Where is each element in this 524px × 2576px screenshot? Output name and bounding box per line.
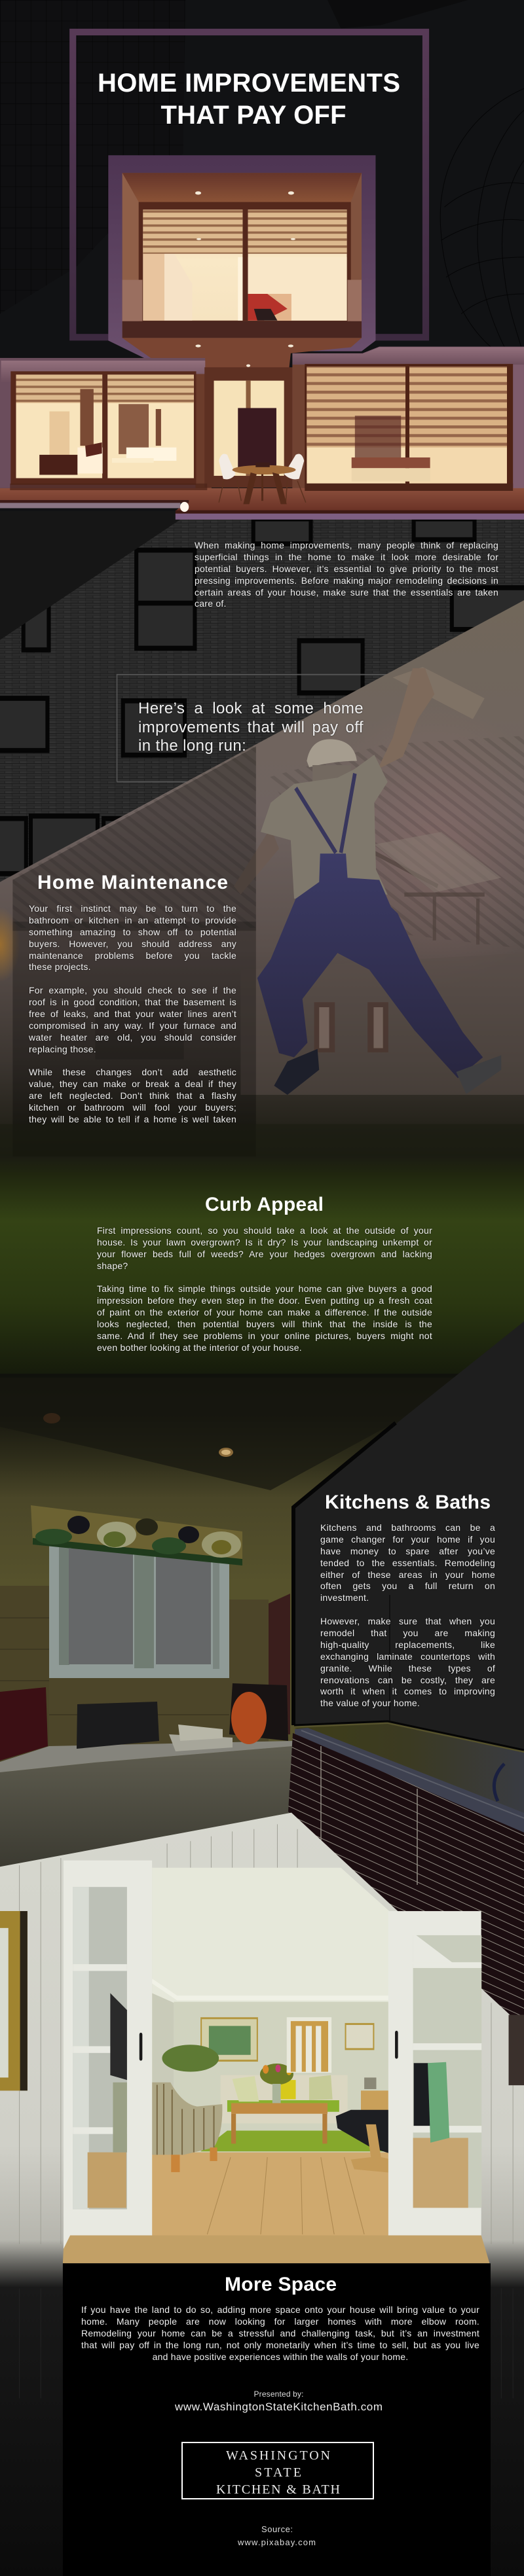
roof shingles xyxy=(12,736,524,949)
garden lamp xyxy=(180,502,189,512)
text: kitchens and baths body: renovations can be costly, they are xyxy=(320,1675,495,1685)
tub xyxy=(294,1724,524,1833)
bench xyxy=(0,1741,293,1872)
text: home maintenance body: replacing those. xyxy=(29,1044,96,1054)
floor xyxy=(152,2153,389,2237)
text: kitchens and baths body: tended to the essentials. Remodeling xyxy=(320,1558,495,1568)
text: more space body: and have positive experiences within the walls of your home. xyxy=(153,2352,408,2362)
lights xyxy=(195,191,295,367)
text: kitchens and baths body: worth it when it comes to improving xyxy=(320,1686,495,1696)
text: kitchens and baths body: either of these areas in your home xyxy=(320,1569,495,1580)
ceiling shade xyxy=(0,1378,524,1490)
title: THAT PAY OFF xyxy=(161,101,346,130)
website url: www.WashingtonStateKitchenBath.com xyxy=(174,2401,383,2413)
ground glow xyxy=(0,907,20,982)
text: home maintenance body: they will be able to tell if a home is well taken xyxy=(29,1114,236,1124)
striped wall tile xyxy=(269,1594,290,1734)
house: left block xyxy=(0,358,212,489)
text: curb appeal body: shape? xyxy=(97,1261,128,1271)
logo: washington state kitchen and bath: STATE xyxy=(255,2465,301,2480)
roller in hand xyxy=(392,667,485,719)
left shoe xyxy=(274,1049,319,1095)
text: home maintenance body: value, they can make or break a deal if they xyxy=(29,1079,236,1089)
raised arm xyxy=(378,668,434,769)
text: curb appeal body xyxy=(97,1225,432,1353)
source label: www.pixabay.com xyxy=(237,2537,316,2547)
title: HOME IMPROVEMENTS xyxy=(98,69,400,98)
section background: brick building xyxy=(0,510,524,1165)
text: kitchens and baths body: high-quality replacements, like xyxy=(320,1639,495,1650)
tile walls xyxy=(0,1586,269,1762)
gold picture frame xyxy=(0,1911,28,2090)
text: home maintenance body: kitchen or bathroom will fool your buyers; xyxy=(29,1102,236,1113)
roof beams xyxy=(374,832,501,944)
text: intro paragraph: certain areas of your house, make sure that the essentials are taken xyxy=(195,587,498,598)
towels xyxy=(169,1725,233,1751)
text: kitchens and baths body: game changer for your home if you xyxy=(320,1534,495,1545)
icon: modern house xyxy=(0,155,524,520)
floor threshold xyxy=(63,2235,489,2263)
panel: text shade xyxy=(12,746,256,1165)
house: center entry xyxy=(204,367,293,488)
text: intro paragraph: care of. xyxy=(195,598,227,609)
text: home maintenance body: buyers. However, you should address any xyxy=(29,939,236,949)
text: curb appeal body: of paint on the exterior of your home can make a difference. If the outside xyxy=(97,1307,432,1317)
text: more space body: Remodeling your home can be a stressful and challenging task, but it’s an investment xyxy=(81,2328,479,2338)
table and chairs xyxy=(219,454,306,504)
house: right block xyxy=(292,347,524,489)
text: lead-in statement xyxy=(138,700,364,755)
text: intro paragraph: When making home improvements, many people think of replacing xyxy=(195,540,498,550)
text: home maintenance body: maintenance problems before you tackle xyxy=(29,950,236,961)
dark upper-left corner xyxy=(0,510,194,640)
text: kitchens and baths body: the value of your home. xyxy=(320,1698,420,1708)
text: more space body: that will pay off in the long run, not only monetarily when it’s time to sell, but as you live xyxy=(81,2340,479,2350)
section: jumping worker photo panel xyxy=(0,600,524,1165)
house: upper box xyxy=(108,155,375,369)
text: intro paragraph: superficial things in the home to make it look more desirable for xyxy=(195,552,498,562)
text: home maintenance body: these projects. xyxy=(29,961,91,972)
eave shadow xyxy=(12,921,256,931)
right picture frame xyxy=(509,2015,524,2085)
coffee table xyxy=(231,2103,328,2143)
text: kitchens and baths body xyxy=(320,1522,495,1708)
window xyxy=(49,1545,229,1678)
white wall xyxy=(0,1813,524,2287)
text: kitchens and baths body: Kitchens and bathrooms can be a xyxy=(320,1522,495,1533)
roller blind xyxy=(31,1505,242,1565)
left arm xyxy=(234,828,279,895)
text: curb appeal body: impression before they even step in the door. Even putting up a fresh coat xyxy=(97,1295,432,1306)
text: home maintenance body: water heater are old, you should consider xyxy=(29,1032,236,1043)
house wall and windows xyxy=(240,953,524,1095)
shirt xyxy=(261,755,388,899)
text: more space body: home. Many people are now looking for larger homes with more elbow room. xyxy=(81,2316,479,2327)
text: kitchens and baths body: However, make sure that when you xyxy=(320,1616,495,1626)
text: home maintenance body: roof is in good condition, that the basement is xyxy=(29,997,236,1007)
text: home maintenance body: For example, you should check to see if the xyxy=(29,985,236,995)
flowers xyxy=(260,2064,293,2103)
neck xyxy=(312,765,351,788)
title xyxy=(98,69,400,130)
pillows xyxy=(0,1683,288,1761)
text: home maintenance body xyxy=(29,903,236,1124)
text: kitchens and baths body: often gets you a full return on xyxy=(320,1581,495,1591)
pink glow on roof xyxy=(307,702,524,986)
top hero background xyxy=(0,0,524,520)
dark tile wall xyxy=(288,1733,524,2029)
text: home maintenance body: are left neglected. Don’t think that a flashy xyxy=(29,1090,236,1101)
logo: washington state kitchen and bath: WASHINGTON xyxy=(226,2448,330,2463)
text: lead-in statement: Here’s a look at some home xyxy=(138,700,364,717)
icon: dark grid tower xyxy=(0,0,185,314)
section: living room xyxy=(0,1813,524,2576)
section: bathroom xyxy=(0,1321,524,2029)
fade to dark xyxy=(0,2240,524,2289)
panel: kitchens and baths xyxy=(291,1321,524,1750)
foreground grass fade xyxy=(0,1124,524,1165)
text: kitchens and baths body: granite. While these types of xyxy=(320,1663,495,1673)
text: kitchens and baths body: remodel that you are making xyxy=(320,1628,495,1638)
right shoe xyxy=(456,1055,501,1094)
presented by label: Presented by: xyxy=(254,2389,304,2399)
black recliner xyxy=(336,2110,415,2173)
text: curb appeal body: Taking time to fix simple things outside your home can give buyers a good xyxy=(97,1283,432,1294)
left door xyxy=(64,1861,152,2249)
text: more space body xyxy=(81,2304,479,2362)
right door xyxy=(388,1911,481,2246)
footer side background xyxy=(0,2287,524,2576)
text: home maintenance body: something amazing to show off to potential xyxy=(29,927,236,937)
heading: kitchens and baths: Kitchens & Baths xyxy=(325,1492,491,1513)
plant xyxy=(162,2045,219,2072)
text: lead-in statement: in the long run: xyxy=(138,737,246,755)
blurred window behind text xyxy=(95,1001,184,1060)
text: curb appeal body: house. Is your lawn overgrown? Is it dry? Is your landscaping unkempt or xyxy=(97,1237,432,1247)
text: kitchens and baths body: exchanging laminate countertops with xyxy=(320,1651,495,1662)
rug xyxy=(200,2130,384,2151)
helmet xyxy=(307,739,357,767)
heading: more space: More Space xyxy=(225,2274,337,2295)
frame outline xyxy=(117,675,524,782)
text: intro paragraph xyxy=(195,540,498,609)
text: curb appeal body: even bother looking at the interior of your house. xyxy=(97,1342,302,1353)
text: intro paragraph: potential buyers. However, it’s essential to give priority to the most xyxy=(195,564,498,574)
text: curb appeal body: your flower beds full of weeds? Are your hedges overgrown and lacking xyxy=(97,1249,432,1259)
text: home maintenance body: compromised in any way. If your furnace and xyxy=(29,1020,236,1031)
house: deck xyxy=(0,484,524,520)
text: lead-in statement: improvements that will pay off xyxy=(138,719,364,736)
logo: washington state kitchen and bath xyxy=(182,2442,373,2499)
source label: Source: xyxy=(261,2524,293,2534)
interior xyxy=(152,1868,389,2244)
section: lawn background xyxy=(0,1156,524,1819)
source label xyxy=(237,2524,316,2547)
heading: curb appeal: Curb Appeal xyxy=(205,1194,324,1215)
text: home maintenance body: While these changes don’t add aesthetic xyxy=(29,1067,236,1077)
text: kitchens and baths body: investment. xyxy=(320,1592,369,1603)
wall art and door xyxy=(201,2017,388,2111)
ceiling lights xyxy=(43,1413,233,1457)
worker xyxy=(234,667,501,1095)
text: home maintenance body: Your first instinct may be to turn to the xyxy=(29,903,236,914)
text: curb appeal body: First impressions count, so you should take a look at the outside of your xyxy=(97,1225,432,1236)
heading: home maintenance: Home Maintenance xyxy=(37,872,228,893)
frame: purple square xyxy=(73,32,426,337)
bib and trousers xyxy=(257,853,483,1078)
icon: dark roof shape xyxy=(328,0,468,28)
sofa xyxy=(221,2075,348,2123)
text: intro paragraph: pressing improvements. Before making major remodeling decisions in xyxy=(195,575,498,586)
text: home maintenance body: bathroom or kitchen in an attempt to provide xyxy=(29,915,236,925)
brick windows xyxy=(0,519,524,881)
armchair xyxy=(152,2083,222,2172)
panel: more space xyxy=(63,2263,491,2576)
text: curb appeal body: looks neglected, then potential buyers will think that the inside is the xyxy=(97,1319,432,1329)
text: kitchens and baths body: have money to spare after you’ve xyxy=(320,1546,495,1556)
text: curb appeal body: same. And if they see problems in your online pictures, buyers might not xyxy=(97,1331,432,1341)
icon: wire globe building xyxy=(440,88,524,348)
logo: washington state kitchen and bath: KITCHEN & BATH xyxy=(216,2482,340,2497)
suspenders xyxy=(296,774,355,853)
text: home maintenance body: free of leaks, and that your water lines aren’t xyxy=(29,1009,236,1019)
bathroom wall and ceiling xyxy=(0,1374,524,1819)
text: more space body: If you have the land to do so, adding more space onto your house will bring value to your xyxy=(81,2304,479,2315)
